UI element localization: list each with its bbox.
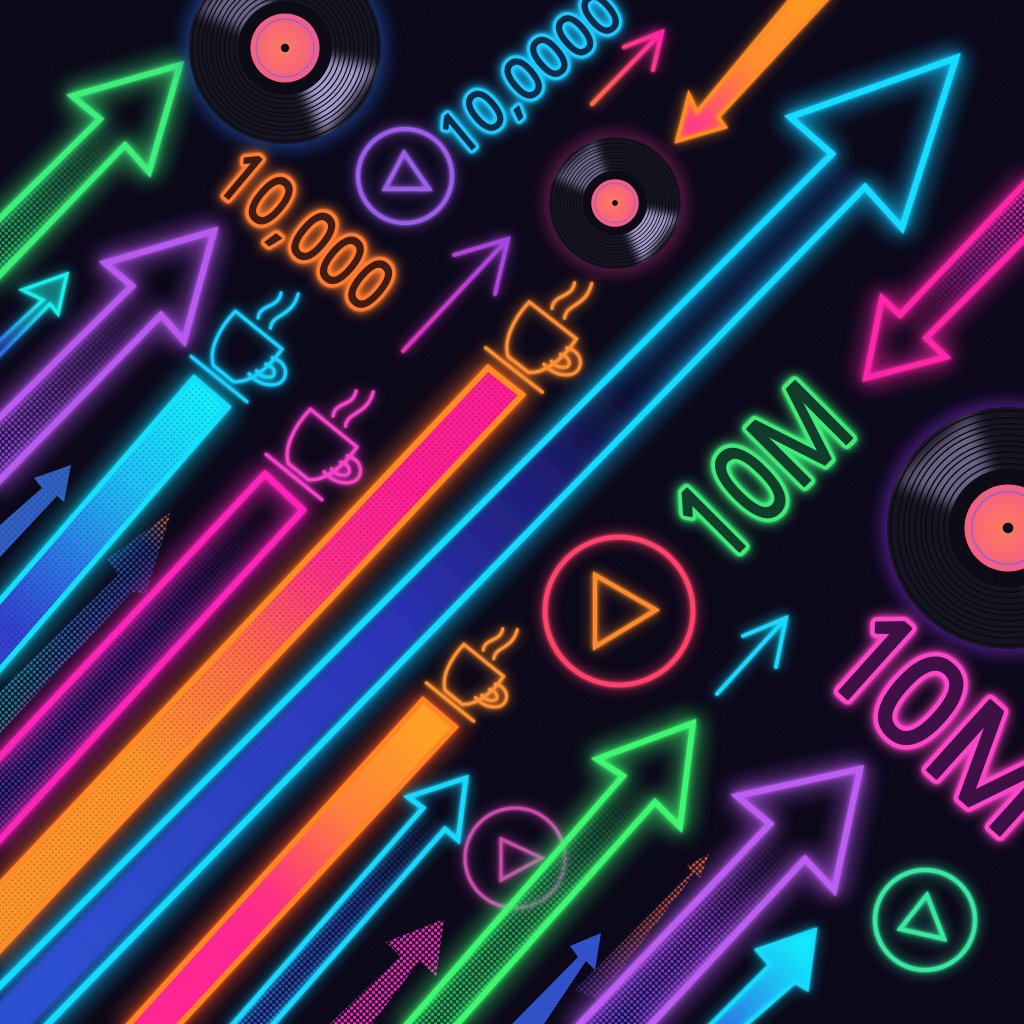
arrow: green outline top left [0,65,180,281]
arrow: big green outline [402,723,693,1024]
arrow: orange down-left [677,0,832,141]
bar: cyan with blue gradient [0,378,228,676]
icon: orange coffee cup bottom [426,606,545,729]
icon: cyan coffee cup [191,266,331,411]
text: 10M green: 10M [657,367,872,582]
bar: magenta outline [0,474,303,846]
arrow: halftone blue with orange tip [0,512,171,733]
vinyl record: top [185,0,385,148]
text: 10,000 orange: 10,000 [204,141,405,325]
icon: orange coffee cup top [486,256,625,401]
play button: pink behind green arrow [465,808,565,908]
bar: pink to orange [0,368,522,956]
text: 10M green: 10M [657,367,872,582]
arrow: big purple outline [574,769,860,1024]
text: 10,000 orange: 10,000 [204,141,405,325]
thin arrow: magenta center [403,239,508,351]
vinyl record: right [883,403,1024,653]
arrow: cyan bottom solid [705,930,815,1024]
arrow: small cyan [0,274,67,359]
thin arrow: pink top [592,32,662,104]
arrow: purple outline left [0,231,214,486]
play button: green [875,870,975,970]
vinyl record: middle [546,134,684,272]
icon: magenta coffee cup [266,364,406,509]
play button: red with orange triangle [545,537,693,685]
bar: orange to pink [124,700,455,1024]
arrow: orange halftone bottom [575,854,709,1000]
arrow: cyan thin outline [228,778,466,1024]
play button: purple [358,129,452,223]
thin arrow: cyan middle [717,618,786,694]
arrow: magenta halftone [330,919,444,1024]
arrow: blue solid bottom [512,933,601,1024]
arrow: blue solid left [0,465,71,557]
arrow: pink down-left outline [866,178,1024,378]
